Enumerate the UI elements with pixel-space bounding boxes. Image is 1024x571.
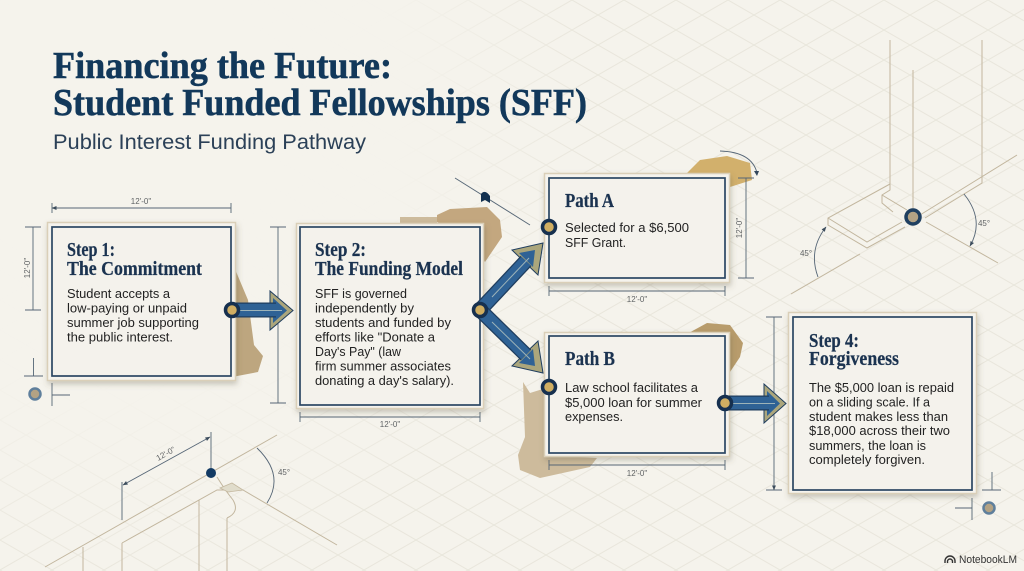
heading: step 4 (809, 331, 899, 370)
arrow: step 1 to step 2 (226, 291, 293, 330)
panel: path B (544, 332, 730, 456)
body: step 4 (809, 380, 954, 467)
body: path B: Law school facilitates a (565, 380, 699, 395)
heading: step 2: Step 2: (315, 240, 366, 261)
body: step 1: summer job supporting (67, 315, 199, 330)
arrow: step 2 to path A (480, 243, 543, 310)
dimension label: step 1 side: 12'-0" (23, 258, 32, 278)
body: path A (565, 220, 689, 250)
body: step 1: low-paying or unpaid (67, 300, 187, 316)
body: step 4: summers, the loan is (809, 438, 926, 453)
title: Student Funded Fellowships (SFF) (53, 82, 587, 124)
parchment shapes behind cards (232, 151, 759, 478)
body: step 4: $18,000 across their two (809, 423, 950, 438)
body: step 2: donating a day's salary). (315, 373, 454, 388)
title (53, 45, 587, 124)
heading: step 1 (67, 240, 202, 280)
angle label: left: 45° (800, 249, 812, 258)
dimension label: path B bottom: 12'-0" (627, 469, 647, 478)
dimension label: path A side: 12'-0" (735, 218, 744, 238)
body: step 2: Day's Pay" (law (315, 344, 401, 359)
dimension lines (23, 178, 1001, 520)
body: path B (565, 380, 703, 424)
node: step 2 branch (474, 304, 486, 316)
dimension label: step 2 bottom: 12'-0" (380, 420, 400, 429)
node: path A entry (542, 220, 556, 234)
heading: step 1: The Commitment (67, 259, 202, 280)
dimension label: step 1 top: 12'-0" (131, 197, 151, 206)
body: step 2 (315, 286, 454, 388)
corner marker: lower right (984, 502, 994, 514)
arrow: step 2 to path B (480, 310, 543, 373)
subtitle: Public Interest Funding Pathway (53, 131, 367, 154)
body: path A: Selected for a $6,500 (565, 220, 689, 235)
body: step 1: the public interest. (67, 330, 173, 344)
angle label: 45° (278, 468, 290, 477)
body: step 4: The $5,000 loan is repaid (809, 380, 954, 395)
body: step 2: SFF is governed (315, 286, 407, 301)
body: step 4: student makes less than (809, 409, 948, 424)
icon: navy flag marker (481, 192, 490, 203)
isometric drawing: bottom left (45, 432, 337, 571)
corner marker: lower left (30, 388, 40, 400)
panel: path A (544, 174, 730, 282)
body: path A: SFF Grant. (565, 235, 626, 250)
isometric drawing: top right (791, 40, 1017, 294)
angle label: right: 45° (978, 219, 990, 228)
node: path B entry (542, 380, 556, 394)
body: path B: expenses. (565, 409, 623, 424)
heading: step 1: Step 1: (67, 240, 115, 261)
dimension label: 12 feet: 12'-0" (155, 445, 177, 463)
body: step 2: efforts like "Donate a (315, 330, 436, 344)
body: step 1 (67, 286, 199, 344)
body: step 2: independently by (315, 300, 414, 316)
NotebookLM logo: NotebookLM (959, 554, 1017, 566)
arrow: path B to step 4 (718, 384, 786, 423)
heading: step 4: Forgiveness (809, 349, 899, 370)
body: step 4: on a sliding scale. If a (809, 394, 931, 410)
body: step 2: students and funded by (315, 315, 451, 330)
panel: step 2 (296, 224, 484, 408)
node: isometric corner (206, 468, 216, 478)
heading: path A: Path A (565, 191, 614, 212)
heading: step 2 (315, 240, 464, 280)
dimension label: path A bottom: 12'-0" (627, 295, 647, 304)
panel: step 4 (788, 312, 976, 494)
title: Financing the Future: (53, 45, 392, 87)
heading: step 4: Step 4: (809, 331, 859, 352)
node: isometric joint (906, 210, 920, 224)
heading: path B: Path B (565, 349, 615, 370)
body: step 4: completely forgiven. (809, 452, 925, 467)
body: step 1: Student accepts a (67, 286, 171, 301)
body: step 2: firm summer associates (315, 358, 451, 374)
body: path B: $5,000 loan for summer (565, 395, 703, 410)
heading: step 2: The Funding Model (315, 259, 464, 280)
panel: step 1 (48, 222, 236, 380)
